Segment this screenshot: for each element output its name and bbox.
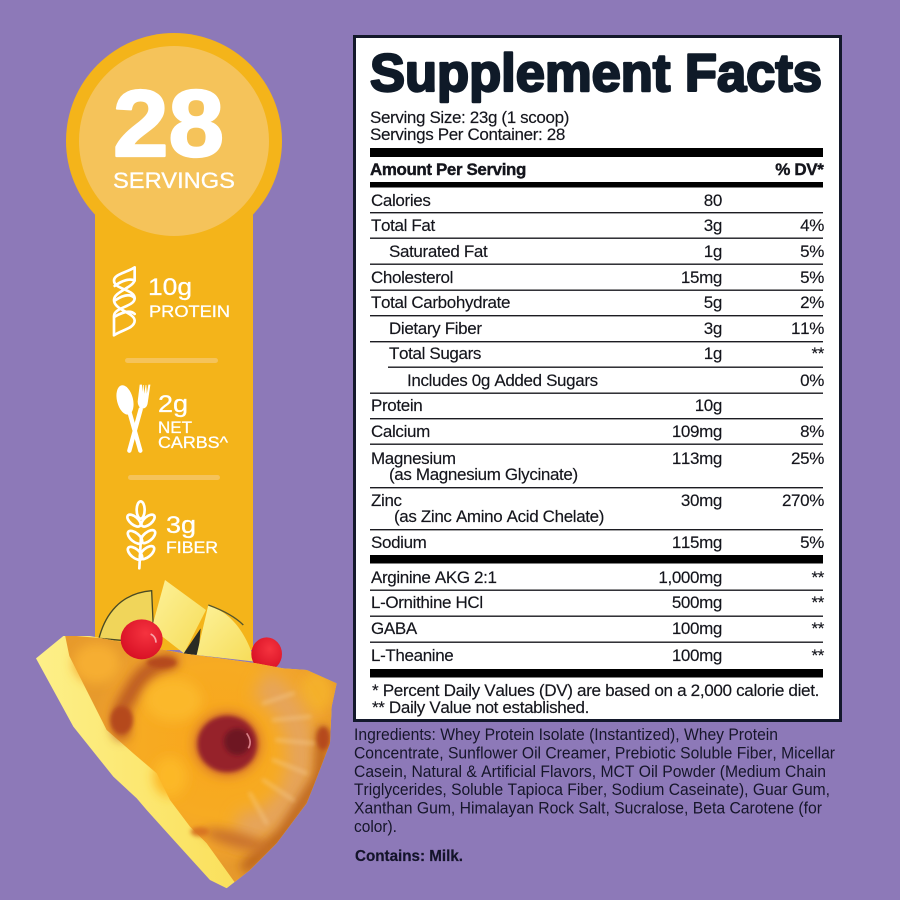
nutrient rows: Saturated Fat <box>389 242 488 261</box>
panel: yellow ribbon with servings badge <box>66 33 282 650</box>
nutrient rows: 1g <box>704 344 722 363</box>
stat: fiber <box>125 501 218 568</box>
nutrient rows: 5% <box>800 268 824 287</box>
serving info: Servings Per Container: 28 <box>370 125 565 144</box>
nutrient rows <box>371 191 825 552</box>
nutrient rows: 2% <box>800 293 824 312</box>
nutrient rows: Magnesium <box>371 449 456 468</box>
ingredients text: color). <box>354 818 397 836</box>
ingredients text: Xanthan Gum, Himalayan Rock Salt, Sucralose, Beta Carotene (for <box>354 800 823 818</box>
nutrient rows: Total Carbohydrate <box>371 293 510 312</box>
icon: protein helix <box>114 267 135 335</box>
divider <box>125 358 218 363</box>
ingredient amounts: 100mg <box>672 619 722 638</box>
ingredients text: Triglycerides, Soluble Tapioca Fiber, Sodium Caseinate), Guar Gum, <box>354 781 830 799</box>
nutrient rows: 1g <box>704 242 722 261</box>
nutrient rows: 5% <box>800 533 824 552</box>
back cherry <box>251 637 282 671</box>
ingredients text <box>354 726 836 836</box>
servings badge: 28 <box>113 71 224 177</box>
ingredients text: Ingredients: Whey Protein Isolate (Instantized), Whey Protein <box>354 726 778 744</box>
panel: supplement facts label <box>354 36 840 720</box>
icon: wheat <box>125 501 157 568</box>
ingredient amounts: ** <box>811 593 825 612</box>
ingredient amounts: 1,000mg <box>658 568 722 587</box>
table header: % DV* <box>775 160 824 179</box>
nutrient rows: Includes 0g Added Sugars <box>407 371 598 390</box>
nutrient rows: 11% <box>791 319 824 338</box>
stat: protein: 10g <box>148 274 192 301</box>
thick rule <box>370 555 823 564</box>
thick rule <box>370 148 823 157</box>
nutrient rows: 5g <box>704 293 722 312</box>
ingredient amounts: 500mg <box>672 593 722 612</box>
icon: spoon and fork <box>114 383 150 451</box>
ingredient amounts <box>371 568 825 665</box>
nutrient rows: Calories <box>371 191 430 210</box>
nutrient rows: Total Sugars <box>389 344 481 363</box>
ingredient amounts: ** <box>811 568 825 587</box>
servings badge <box>79 46 269 236</box>
nutrient rows: Cholesterol <box>371 268 453 287</box>
ingredients text: Casein, Natural & Artificial Flavors, MCT Oil Powder (Medium Chain <box>354 763 826 781</box>
nutrient rows: 0% <box>800 371 824 390</box>
nutrient rows: 3g <box>704 216 722 235</box>
caramelised top <box>65 635 347 888</box>
nutrient rows: 80 <box>704 191 722 210</box>
tan ring outer <box>237 683 302 827</box>
thick rule <box>370 669 823 678</box>
ingredient amounts: ** <box>811 619 825 638</box>
stat: net carbs: NET <box>158 418 192 437</box>
ingredients text: Concentrate, Sunflower Oil Creamer, Prebiotic Soluble Fiber, Micellar <box>354 744 836 762</box>
nutrient rows: Dietary Fiber <box>389 319 482 338</box>
illustration: pineapple upside-down cake slice <box>30 580 347 893</box>
table header <box>370 160 824 179</box>
allergen statement: Contains: Milk. <box>355 848 463 865</box>
table header: Amount Per Serving <box>370 160 526 179</box>
nutrient rows: 3g <box>704 319 722 338</box>
front cherry <box>121 619 163 659</box>
cake body <box>36 636 336 888</box>
light top-left glaze <box>73 643 120 683</box>
nutrient rows: Protein <box>371 396 422 415</box>
ingredient amounts: GABA <box>371 619 418 638</box>
fibre streaks <box>250 693 313 823</box>
golden ring flesh <box>145 678 202 722</box>
nutrient rows: 109mg <box>672 422 722 441</box>
stat: net carbs: CARBS^ <box>158 433 228 452</box>
serving info <box>370 108 569 144</box>
nutrient rows: 270% <box>782 491 824 510</box>
ring centre <box>193 711 261 777</box>
footnotes: ** Daily Value not established. <box>372 698 589 717</box>
stat: net carbs <box>114 383 228 452</box>
thick rule <box>370 182 823 188</box>
divider <box>128 475 220 480</box>
ingredient amounts: L-Ornithine HCl <box>371 593 483 612</box>
nutrient rows: Total Fat <box>371 216 435 235</box>
nutrient rows: Calcium <box>371 422 430 441</box>
nutrient rows: 5% <box>800 242 824 261</box>
serving info: Serving Size: 23g (1 scoop) <box>370 108 569 127</box>
servings badge: SERVINGS <box>113 168 235 193</box>
nutrient rows: 25% <box>791 449 824 468</box>
stat: fiber: 3g <box>166 512 196 539</box>
pineapple wedges <box>99 580 255 662</box>
nutrient rows: 10g <box>695 396 722 415</box>
stat: protein: PROTEIN <box>149 302 230 321</box>
nutrient rows: ** <box>811 344 825 363</box>
caramel band <box>120 662 170 732</box>
nutrient rows: 115mg <box>672 533 722 552</box>
nutrient rows: 113mg <box>672 449 722 468</box>
browned edge <box>243 727 323 870</box>
nutrient rows: Sodium <box>371 533 427 552</box>
nutrient rows: 30mg <box>681 491 722 510</box>
nutrient rows: 15mg <box>681 268 722 287</box>
footnotes <box>372 681 819 717</box>
ingredient amounts: L-Theanine <box>371 646 453 665</box>
stat: protein <box>114 267 230 335</box>
nutrient rows: Zinc <box>371 491 403 510</box>
nutrient rows: 8% <box>800 422 824 441</box>
footnotes: * Percent Daily Values (DV) are based on a 2,000 calorie diet. <box>372 681 819 700</box>
heading: Supplement Facts <box>370 44 822 103</box>
ingredient amounts: ** <box>811 646 825 665</box>
stat: net carbs: 2g <box>158 391 188 418</box>
ingredient amounts: 100mg <box>672 646 722 665</box>
nutrient rows: (as Magnesium Glycinate) <box>389 465 578 484</box>
stat: fiber: FIBER <box>166 538 218 557</box>
nutrient rows: (as Zinc Amino Acid Chelate) <box>394 507 604 526</box>
rules <box>370 212 823 643</box>
nutrient rows: 4% <box>800 216 824 235</box>
ingredient amounts: Arginine AKG 2:1 <box>371 568 497 587</box>
